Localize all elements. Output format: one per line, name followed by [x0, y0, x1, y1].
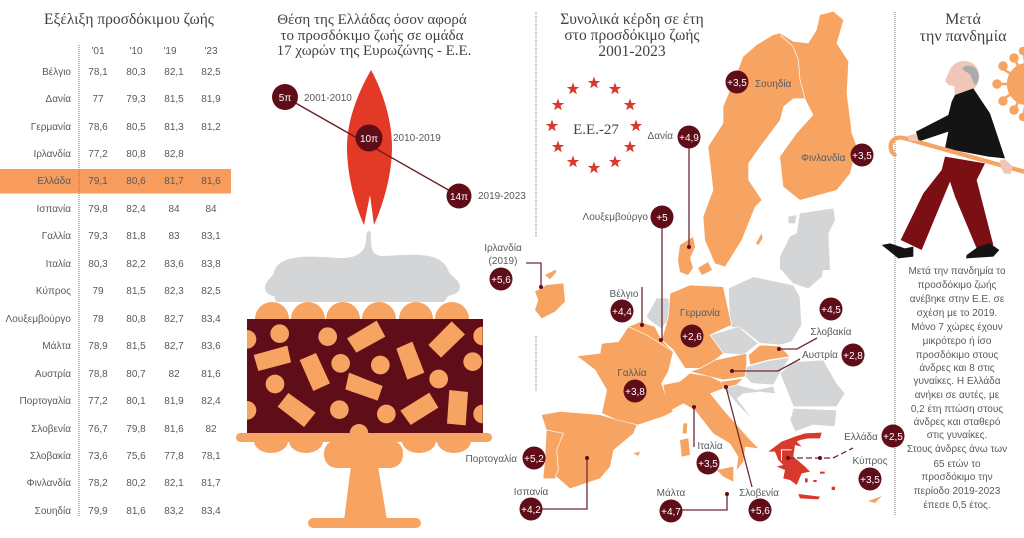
table values: 82,2	[126, 259, 146, 270]
country labels: Ιταλία	[697, 440, 723, 452]
heading: Greece position	[277, 12, 471, 59]
table country names: Σουηδία	[35, 505, 71, 517]
table country names: Αυστρία	[35, 368, 71, 380]
rank timeline: 5π	[279, 93, 291, 104]
table values: 82,3	[164, 286, 184, 297]
value bubbles: +5,6	[491, 275, 511, 286]
country labels: Φινλανδία	[801, 152, 846, 164]
table values: 81,9	[164, 396, 184, 407]
country labels: (2019)	[489, 256, 517, 267]
value bubbles: +2,5	[883, 432, 903, 443]
table values: 81,7	[164, 176, 184, 187]
table values: 84	[205, 204, 217, 215]
table country names: Ιταλία	[46, 258, 71, 270]
table values: 81,6	[201, 176, 221, 187]
table values: 78,1	[201, 451, 221, 462]
value bubbles: +4,2	[521, 505, 541, 516]
table values: 82,7	[164, 314, 184, 325]
table country names: Μάλτα	[42, 340, 71, 352]
table values: 79,3	[88, 231, 108, 242]
table country names: Λουξεμβούργο	[6, 313, 71, 325]
icon: EU stars	[546, 76, 642, 173]
table values: 81,6	[164, 424, 184, 435]
table country names: Ισπανία	[36, 203, 71, 215]
table country names: Σλοβενία	[31, 423, 71, 435]
body text: άνδρες και 8 στις	[919, 362, 995, 374]
value bubbles: +2,6	[682, 332, 702, 343]
table values: 82,1	[164, 478, 184, 489]
heading: Greece position: το προσδόκιμο ζωής σε ομάδα	[281, 28, 464, 44]
body text: ανήκει σε αυτές, με	[915, 389, 1000, 401]
body text: γυναίκες. Η Ελλάδα	[914, 375, 1001, 387]
table values: 78,9	[88, 341, 108, 352]
table values: 78,8	[88, 369, 108, 380]
table values: 82,8	[164, 149, 184, 160]
table heading: Εξέλιξη προσδόκιμου ζωής	[44, 11, 214, 28]
table values: 83,4	[201, 506, 221, 517]
leader lines	[526, 148, 853, 510]
table country names: Βέλγιο	[42, 66, 71, 78]
table values: 80,3	[126, 67, 146, 78]
heading: total gains: 2001-2023	[598, 43, 666, 60]
table values: 81,5	[126, 341, 146, 352]
table country names	[6, 66, 71, 517]
table column headers	[91, 46, 218, 57]
icon: elderly man with cane	[882, 61, 1024, 258]
table values: 81,9	[201, 94, 221, 105]
table values: 81,2	[201, 122, 221, 133]
table values: 79,3	[126, 94, 146, 105]
heading: Greece position: Θέση της Ελλάδας όσον αφορά	[277, 12, 467, 28]
table values: 80,2	[126, 478, 146, 489]
value bubbles: +3,5	[860, 475, 880, 486]
country labels: Γερμανία	[680, 307, 720, 319]
heading: after the pandemic: την πανδημία	[920, 28, 1007, 45]
table values: 82,4	[201, 396, 221, 407]
country labels: Βέλγιο	[610, 288, 639, 300]
table values: 78,2	[88, 478, 108, 489]
rank timeline: 10π	[360, 134, 378, 145]
body text: προσδόκιμο ζωής	[918, 279, 997, 291]
heading: Greece position: 17 χωρών της Ευρωζώνης - Ε.Ε.	[277, 43, 471, 59]
table values: 80,6	[126, 176, 146, 187]
table values: 79,9	[88, 506, 108, 517]
table values: 80,5	[126, 122, 146, 133]
table values: 81,7	[201, 478, 221, 489]
value bubbles: +4,9	[679, 133, 699, 144]
body text: σχέση με το 2019.	[917, 307, 997, 319]
EU-27 label: Ε.Ε.-27	[573, 122, 619, 138]
body text: άνδρες και σταθερό	[914, 416, 1001, 428]
table values: 80,7	[126, 369, 146, 380]
value bubbles: +5	[656, 213, 668, 224]
table values: 81,5	[164, 94, 184, 105]
table values	[88, 67, 221, 517]
table values: 80,3	[88, 259, 108, 270]
table values: 83,4	[201, 314, 221, 325]
country labels: Ιρλανδία	[484, 242, 522, 254]
table values: 83,6	[201, 341, 221, 352]
table values: 73,6	[88, 451, 108, 462]
table country names: Ιρλανδία	[34, 148, 71, 160]
table values: 80,8	[126, 314, 146, 325]
table values: 81,6	[201, 369, 221, 380]
value bubbles: +4,5	[821, 305, 841, 316]
value bubbles: +2,8	[843, 351, 863, 362]
country labels: Κύπρος	[852, 455, 888, 467]
table values: 81,3	[164, 122, 184, 133]
table country names: Φινλανδία	[27, 477, 71, 489]
value bubbles: +3,8	[625, 387, 645, 398]
country labels: Σλοβενία	[739, 487, 779, 499]
table values: 77,2	[88, 396, 108, 407]
country labels	[466, 78, 888, 499]
table column headers: '23	[204, 46, 218, 57]
body text: Μόνο 7 χώρες έχουν	[911, 321, 1003, 333]
table values: 82,5	[201, 286, 221, 297]
heading: total gains: Συνολικά κέρδη σε έτη	[560, 11, 704, 28]
table values: 77,8	[164, 451, 184, 462]
table values: 77	[92, 94, 104, 105]
table values: 81,6	[126, 506, 146, 517]
country labels: Σλοβακία	[810, 326, 852, 338]
table values: 75,6	[126, 451, 146, 462]
panel: Greece rank, candle cake	[236, 12, 526, 528]
table values: 82,7	[164, 341, 184, 352]
value bubbles: +3,5	[727, 78, 747, 89]
table column headers: '19	[163, 46, 177, 57]
table values: 76,7	[88, 424, 108, 435]
value bubbles: +4,4	[612, 307, 632, 318]
country labels: Πορτογαλία	[466, 453, 517, 465]
rank timeline: 2019-2023	[478, 191, 526, 202]
country labels: Γαλλία	[617, 367, 647, 379]
table country names: Γερμανία	[31, 121, 71, 133]
table country names: Σλοβακία	[30, 450, 71, 462]
country labels: Ελλάδα	[844, 431, 878, 443]
table values: 82	[168, 369, 180, 380]
value bubbles: +4,7	[661, 507, 681, 518]
body text: στις γυναίκες.	[927, 429, 987, 441]
icon: cake on stand	[236, 231, 492, 528]
table values: 81,5	[126, 286, 146, 297]
map: Greece	[768, 433, 835, 499]
table country names: Ελλάδα	[37, 175, 71, 187]
heading: after the pandemic: Μετά	[945, 11, 981, 28]
table values: 80,8	[126, 149, 146, 160]
table values: 78,6	[88, 122, 108, 133]
rank timeline: 2010-2019	[393, 133, 441, 144]
country labels: Λουξεμβούργο	[583, 211, 648, 223]
table values: 77,2	[88, 149, 108, 160]
panel: map of gains	[466, 11, 904, 522]
rank timeline	[272, 84, 526, 208]
table values: 78,1	[88, 67, 108, 78]
rank timeline: 2001-2010	[304, 93, 352, 104]
table values: 80,1	[126, 396, 146, 407]
table values: 83,8	[201, 259, 221, 270]
table values: 79,1	[88, 176, 108, 187]
country labels: Αυστρία	[802, 349, 838, 361]
body text: προσδόκιμο την	[921, 471, 993, 483]
map: northern Europe	[703, 12, 857, 270]
table values: 78	[92, 314, 104, 325]
table values: 79	[92, 286, 104, 297]
table values: 84	[168, 204, 180, 215]
table country names: Κύπρος	[36, 285, 71, 297]
rank timeline: 14π	[450, 192, 468, 203]
table values: 83	[168, 231, 180, 242]
icon: flame	[347, 70, 392, 225]
body text: Μετά την πανδημία το	[908, 265, 1006, 277]
body text	[907, 265, 1007, 511]
body text: μικρότερο ή ίσο	[923, 335, 992, 347]
country labels: Ισπανία	[514, 486, 548, 498]
table values: 83,2	[164, 506, 184, 517]
table column headers: '01	[91, 46, 105, 57]
map: Cyprus	[868, 496, 882, 503]
body text: 0,2 έτη πτώση στους	[911, 403, 1003, 415]
map: western and southern Europe	[535, 270, 758, 488]
table column headers: '10	[129, 46, 143, 57]
table values: 82	[205, 424, 217, 435]
table values: 82,5	[201, 67, 221, 78]
value bubbles: +3,5	[852, 151, 872, 162]
body text: Στους άνδρες άνω των	[907, 443, 1007, 455]
icon: virus	[994, 48, 1024, 120]
country labels: Δανία	[648, 130, 673, 142]
table values: 79,8	[126, 424, 146, 435]
body text: περίοδο 2019-2023	[914, 485, 1001, 497]
table country names: Γαλλία	[42, 230, 71, 242]
body text: έπεσε 0,5 έτος.	[923, 499, 991, 511]
map: Denmark	[678, 237, 712, 275]
value bubbles: +5,2	[524, 454, 544, 465]
value bubbles: +3,5	[698, 459, 718, 470]
body text: ανέβηκε στην Ε.Ε. σε	[910, 293, 1005, 305]
table country names: Δανία	[46, 93, 71, 105]
panel: after the pandemic	[882, 11, 1024, 511]
table values: 82,4	[126, 204, 146, 215]
country labels: Μάλτα	[657, 487, 686, 499]
panel: life expectancy table	[0, 11, 231, 517]
map: Baltics, Poland and central-eastern Europe	[690, 268, 845, 432]
table values: 81,8	[126, 231, 146, 242]
table values: 79,8	[88, 204, 108, 215]
body text: 65 ετών το	[933, 458, 981, 470]
table values: 82,1	[164, 67, 184, 78]
heading: total gains	[560, 11, 704, 60]
table country names: Πορτογαλία	[20, 395, 71, 407]
highlighted row: Greece	[0, 169, 231, 194]
body text: προσδόκιμο στους	[916, 349, 998, 361]
value bubbles: +5,6	[750, 506, 770, 517]
table values: 83,6	[164, 259, 184, 270]
value bubbles	[490, 70, 904, 522]
table values: 83,1	[201, 231, 221, 242]
country labels: Σουηδία	[755, 78, 792, 90]
heading: after the pandemic	[920, 11, 1007, 45]
heading: total gains: στο προσδόκιμο ζωής	[564, 27, 700, 44]
